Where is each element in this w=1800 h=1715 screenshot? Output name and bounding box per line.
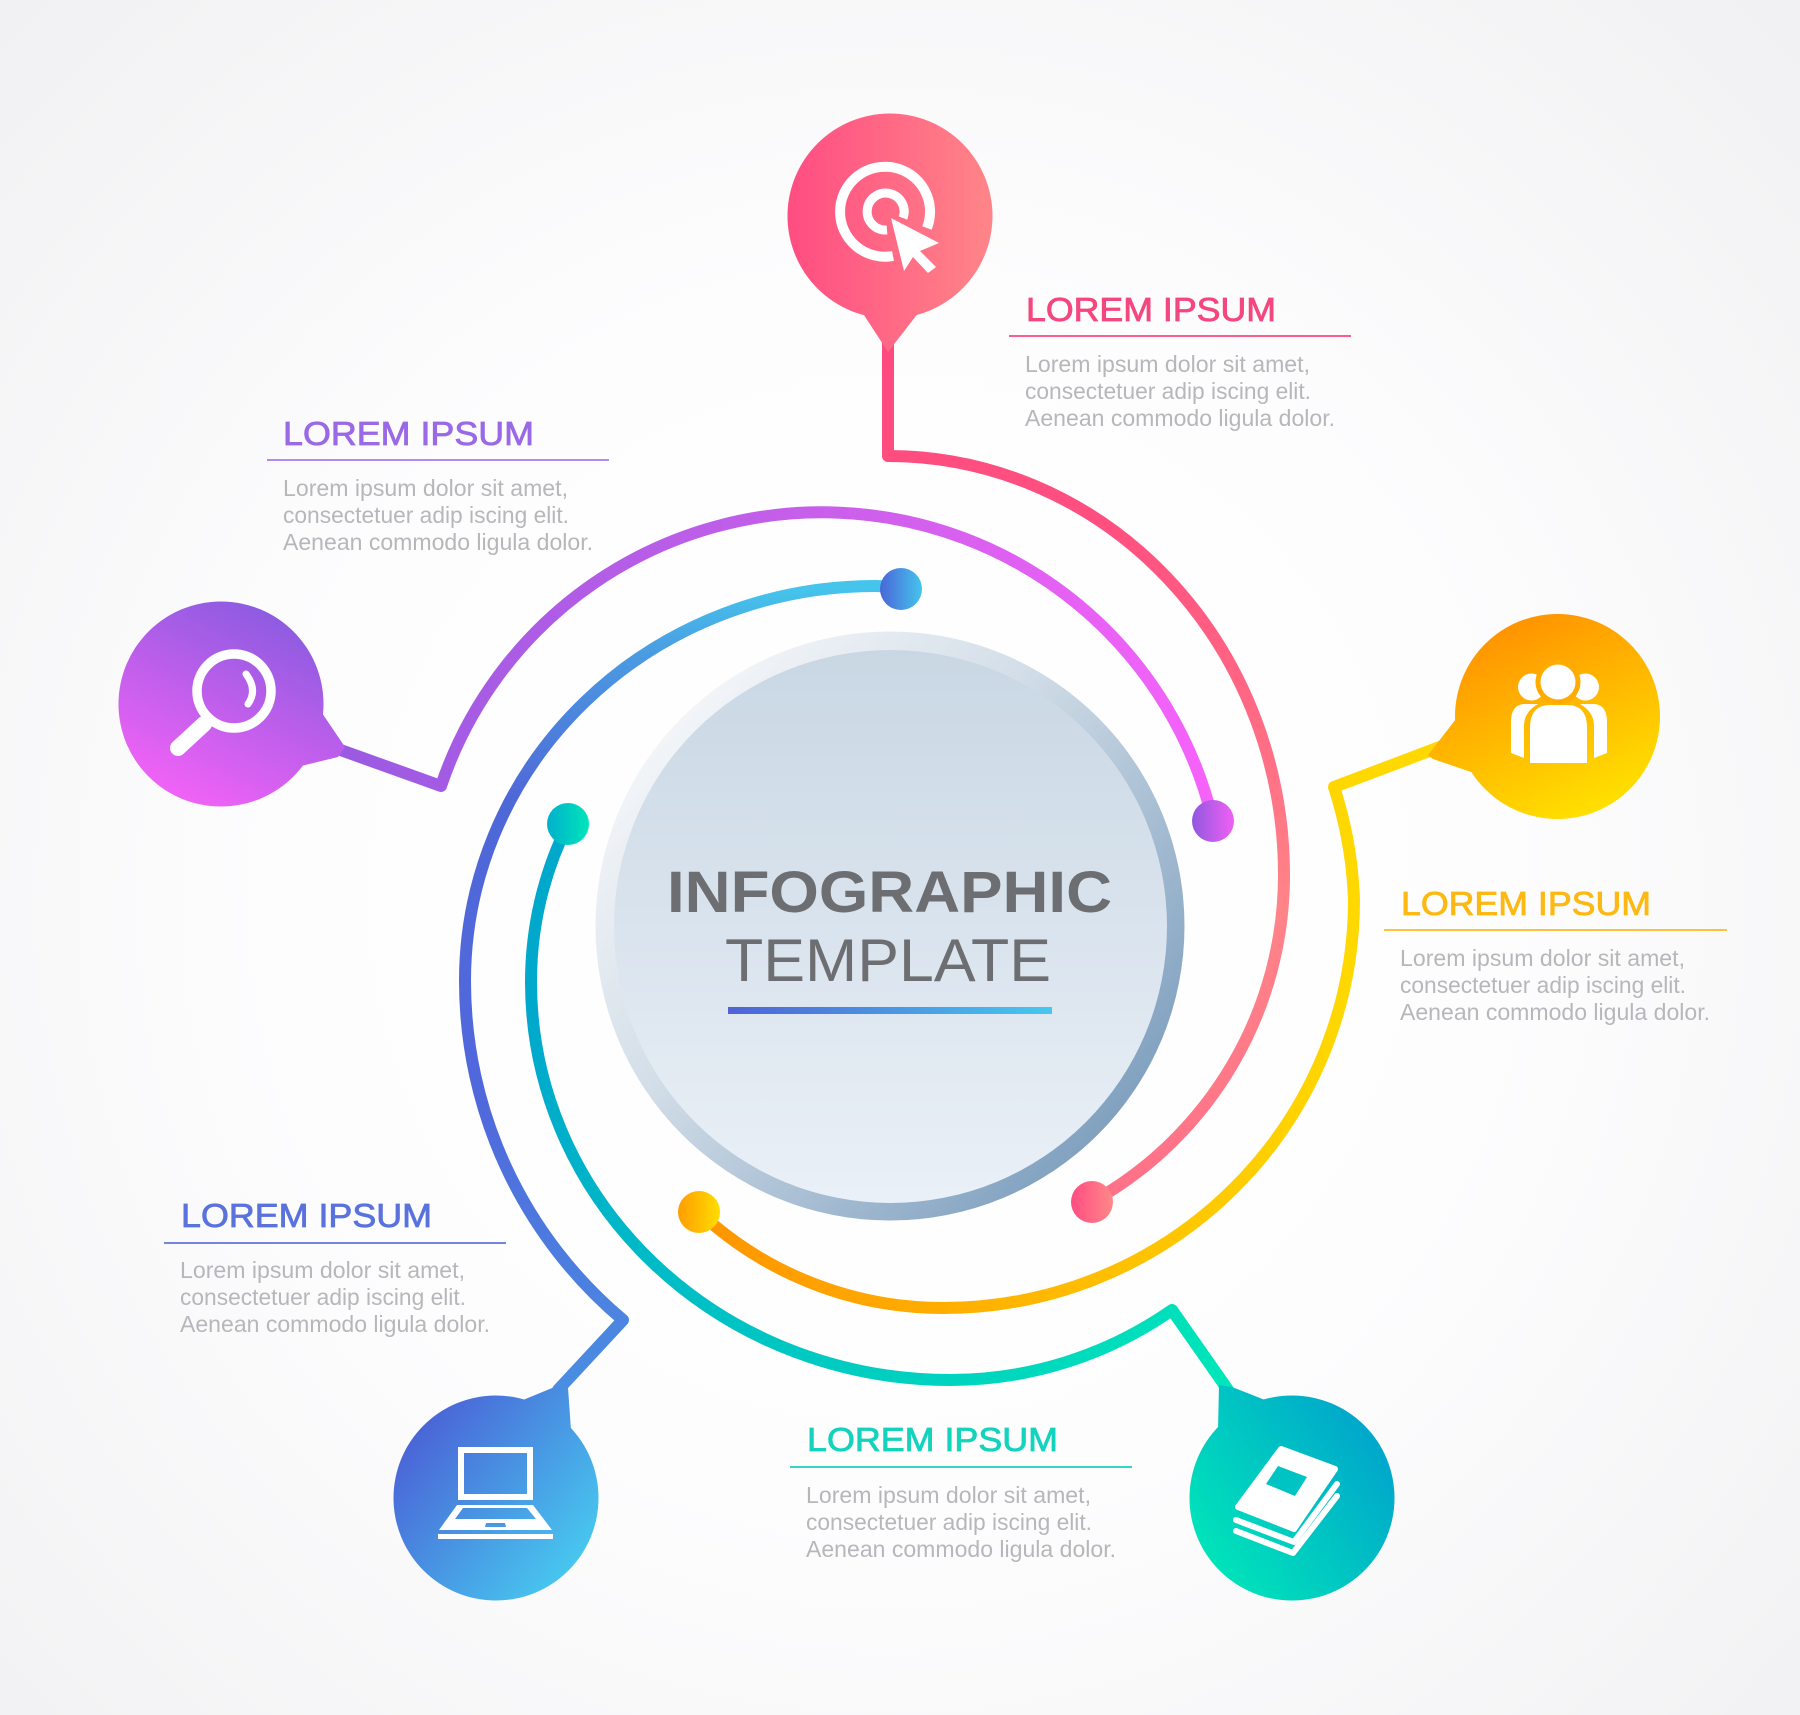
- text block: pink: Aenean commodo ligula dolor.: [1025, 405, 1335, 431]
- text block: blue: LOREM IPSUM: [181, 1198, 432, 1235]
- text block: pink: consectetuer adip iscing elit.: [1025, 378, 1311, 404]
- pin: yellow people: [1428, 614, 1660, 819]
- text block: blue: Lorem ipsum dolor sit amet,: [180, 1257, 465, 1283]
- connector line: pink: [888, 330, 1284, 1202]
- end dot: orange: [678, 1191, 720, 1233]
- text block: teal: LOREM IPSUM: [807, 1422, 1058, 1459]
- text block: blue: [164, 1198, 506, 1337]
- connector line: teal: [531, 824, 1228, 1390]
- title underline: [728, 1007, 1052, 1014]
- text block: yellow: Lorem ipsum dolor sit amet,: [1400, 945, 1685, 971]
- text block: yellow: Aenean commodo ligula dolor.: [1400, 999, 1710, 1025]
- text block: blue: Aenean commodo ligula dolor.: [180, 1311, 490, 1337]
- text block: purple: Lorem ipsum dolor sit amet,: [283, 475, 568, 501]
- connector line: purple: [335, 512, 1213, 821]
- icon: target with cursor: [840, 167, 939, 273]
- end dot: purple: [1192, 800, 1234, 842]
- text block: yellow: consectetuer adip iscing elit.: [1400, 972, 1686, 998]
- pin: pink target: [788, 114, 992, 352]
- text block: pink: LOREM IPSUM: [1026, 292, 1276, 329]
- connector line: blue: [465, 586, 901, 1390]
- end dot: pink: [1071, 1181, 1113, 1223]
- text block: purple: Aenean commodo ligula dolor.: [283, 529, 593, 555]
- text block: teal: consectetuer adip iscing elit.: [806, 1509, 1092, 1535]
- icon: laptop: [438, 1450, 553, 1539]
- pin: blue laptop: [394, 1386, 598, 1600]
- text block: pink: Lorem ipsum dolor sit amet,: [1025, 351, 1310, 377]
- text block: teal: Aenean commodo ligula dolor.: [806, 1536, 1116, 1562]
- icon: book stack: [1236, 1449, 1337, 1553]
- text block: teal: [790, 1422, 1132, 1562]
- pin: teal book: [1190, 1385, 1394, 1600]
- connector line: yellow: [699, 745, 1445, 1308]
- text block: pink: [1009, 292, 1351, 431]
- pin: purple magnifier: [118, 602, 345, 806]
- end dot: blue: [880, 568, 922, 610]
- icon: people group: [1511, 660, 1607, 763]
- title: INFOGRAPHIC: [667, 860, 1112, 925]
- text block: yellow: [1384, 886, 1727, 1025]
- title: [667, 860, 1112, 994]
- text block: purple: [267, 416, 609, 555]
- title: TEMPLATE: [725, 927, 1051, 994]
- text block: teal: Lorem ipsum dolor sit amet,: [806, 1482, 1091, 1508]
- end dot: teal: [547, 803, 589, 845]
- text block: purple: consectetuer adip iscing elit.: [283, 502, 569, 528]
- text block: yellow: LOREM IPSUM: [1401, 886, 1651, 923]
- centre circle: [596, 632, 1184, 1220]
- text block: purple: LOREM IPSUM: [283, 416, 534, 453]
- icon: magnifier: [178, 654, 271, 748]
- text block: blue: consectetuer adip iscing elit.: [180, 1284, 466, 1310]
